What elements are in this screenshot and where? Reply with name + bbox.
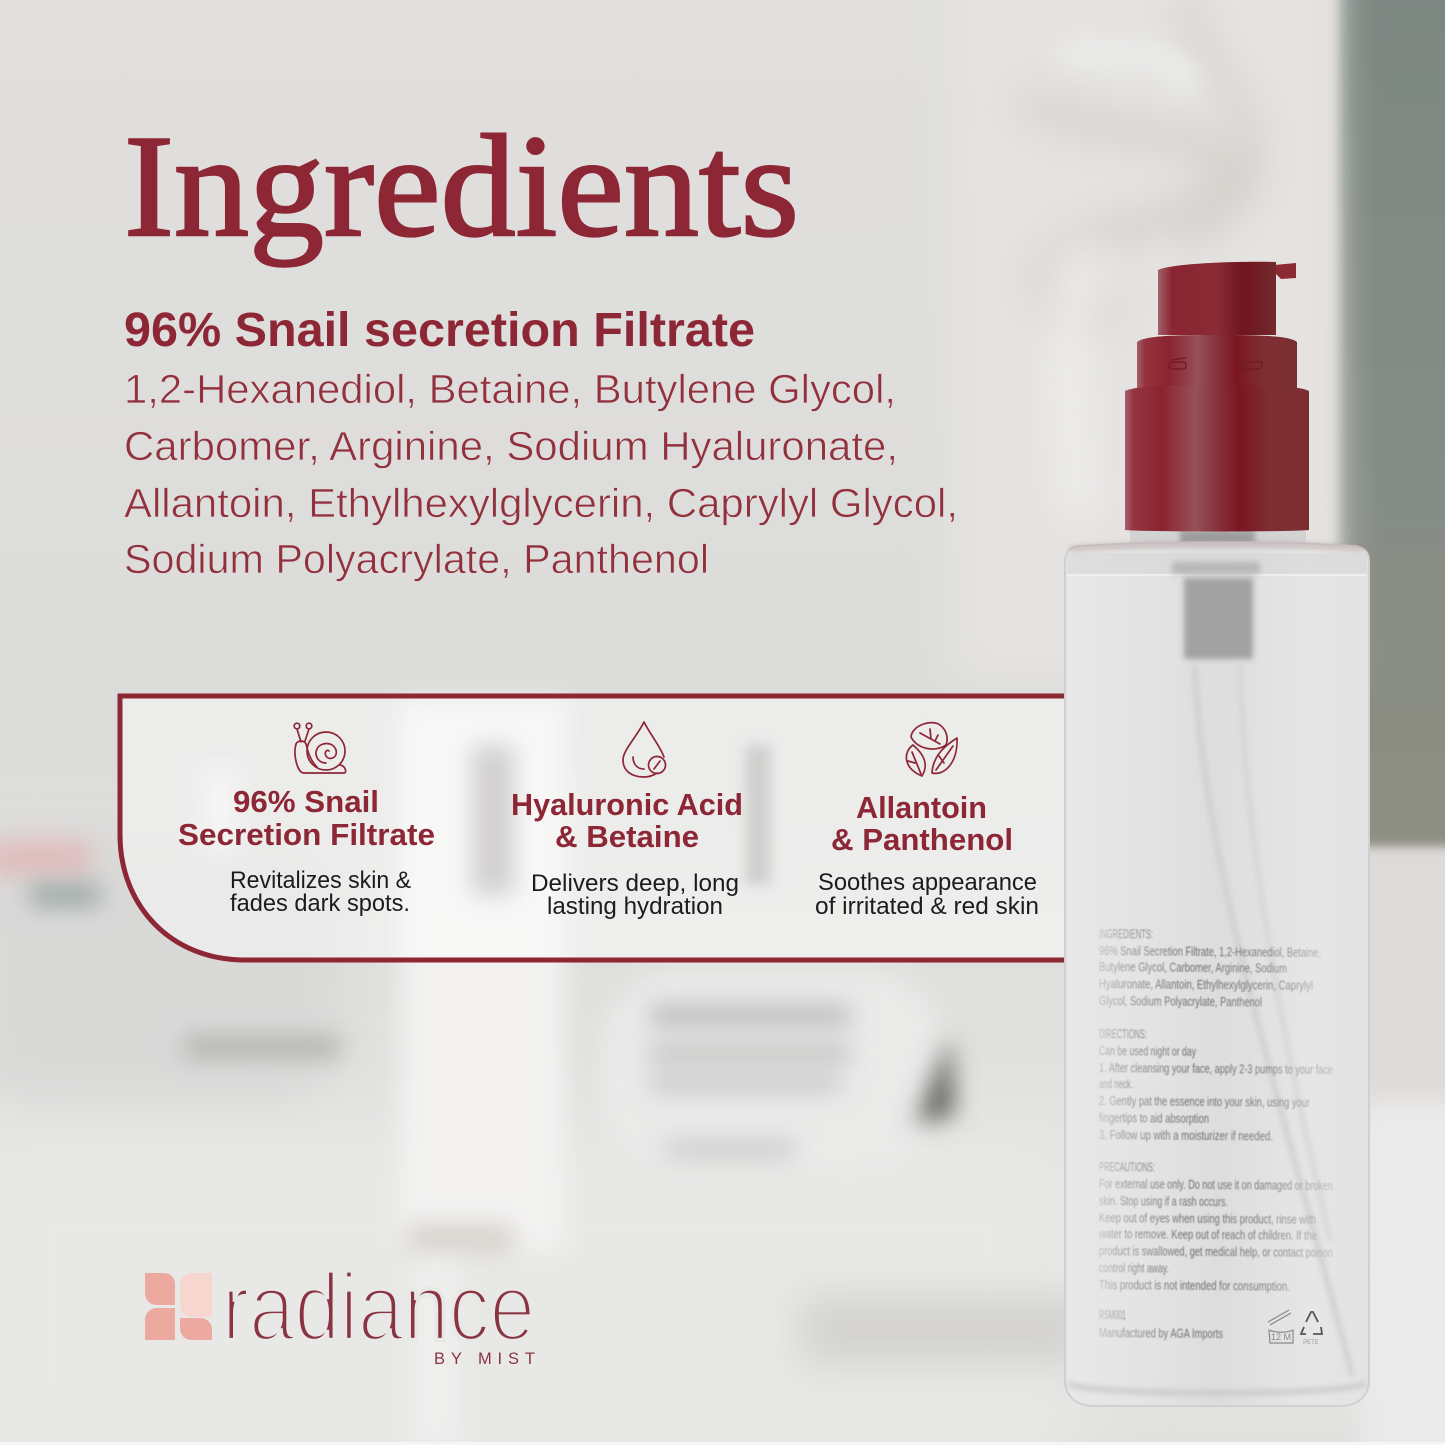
column: hyaluronic acid: Delivers deep, long [531,870,739,897]
bottle label text: For external use only. Do not use it on damaged or broken [1099,1176,1333,1193]
bottle label text: control right away. [1099,1260,1169,1276]
title: Ingredients [124,105,799,267]
bottle label text: 96% Snail Secretion Filtrate, 1,2-Hexanediol, Betaine, [1099,943,1321,960]
bottle label text: INGREDIENTS: [1099,926,1153,941]
column: allantoin: & Panthenol [831,822,1013,857]
bottle label text: Can be used night or day [1099,1043,1196,1059]
icon: water drop with check [623,722,666,777]
column: hyaluronic acid: lasting hydration [547,893,723,920]
ingredients list: Carbomer, Arginine, Sodium Hyaluronate, [124,423,898,469]
column: hyaluronic acid [511,787,743,920]
icon: 12 month shelf life [1268,1310,1293,1343]
ingredients text block [124,304,958,582]
bottle label text: fingertips to aid absorption [1099,1110,1209,1126]
icon: 12 month shelf life: 12 M [1271,1332,1291,1342]
product bottle [1065,262,1369,1406]
bottle label text: water to remove. Keep out of reach of children. If the [1098,1226,1317,1243]
logo: radiance by mist [145,1254,535,1368]
bottle label text: 1. After cleansing your face, apply 2-3 pumps to your face [1099,1060,1333,1077]
column: snail secretion: Secretion Filtrate [178,817,435,852]
icon: recycling PETE: PETE [1303,1340,1319,1346]
bottle label text [1098,926,1333,1342]
logo wordmark: radiance [222,1254,535,1361]
column: snail secretion: 96% Snail [233,784,379,819]
column: hyaluronic acid: & Betaine [555,819,699,854]
icon: recycling leaves [906,723,957,776]
column: allantoin: Allantoin [856,790,987,825]
bottle label text: Keep out of eyes when using this product, rinse with [1099,1210,1316,1227]
ingredients list: Allantoin, Ethylhexylglycerin, Caprylyl Glycol, [124,480,958,526]
bottle label text: 3. Follow up with a moisturizer if needed. [1099,1127,1273,1144]
ingredients subheading: 96% Snail secretion Filtrate [124,304,755,357]
icon: recycling PETE [1301,1312,1322,1346]
column: allantoin: of irritated & red skin [815,893,1039,920]
pump cap [1125,262,1309,532]
logo mark [145,1273,212,1340]
bottle label text: skin. Stop using if a rash occurs. [1099,1193,1228,1209]
bottle label text: PRECAUTIONS: [1099,1159,1155,1174]
column: snail secretion [178,784,435,917]
bottle label text: Hyaluronate, Allantoin, Ethylhexylglycerin, Caprylyl [1099,976,1313,993]
column: snail secretion: fades dark spots. [230,890,410,917]
bottle label text: Butylene Glycol, Carbomer, Arginine, Sodium [1099,959,1287,976]
logo tagline: BY MIST [434,1350,535,1368]
column: snail secretion: Revitalizes skin & [230,867,411,894]
column: allantoin: Soothes appearance [818,869,1037,896]
ingredients list [124,366,958,582]
dip tube collar [1172,562,1260,659]
bottle label text: 2. Gently pat the essence into your skin, using your [1099,1093,1311,1110]
bottle body [1065,528,1369,1406]
column: allantoin [815,790,1039,920]
icon: snail [294,723,346,773]
ingredients list: Sodium Polyacrylate, Panthenol [124,536,709,582]
column: hyaluronic acid: Hyaluronic Acid [511,787,743,822]
bottle label text: DIRECTIONS: [1099,1026,1147,1041]
panel: key ingredient benefits [120,696,1066,960]
ingredients list: 1,2-Hexanediol, Betaine, Butylene Glycol, [124,366,896,412]
bottle label text: Glycol, Sodium Polyacrylate, Panthenol [1099,993,1262,1009]
bottle label text: Manufactured by AGA Imports [1099,1325,1223,1341]
bottle label text: RSM001 [1099,1307,1126,1322]
bottle label text: product is swallowed, get medical help, or contact poison [1099,1243,1333,1260]
bottle label text: This product is not intended for consumption. [1099,1277,1290,1294]
bottle label text: and neck. [1099,1076,1133,1091]
